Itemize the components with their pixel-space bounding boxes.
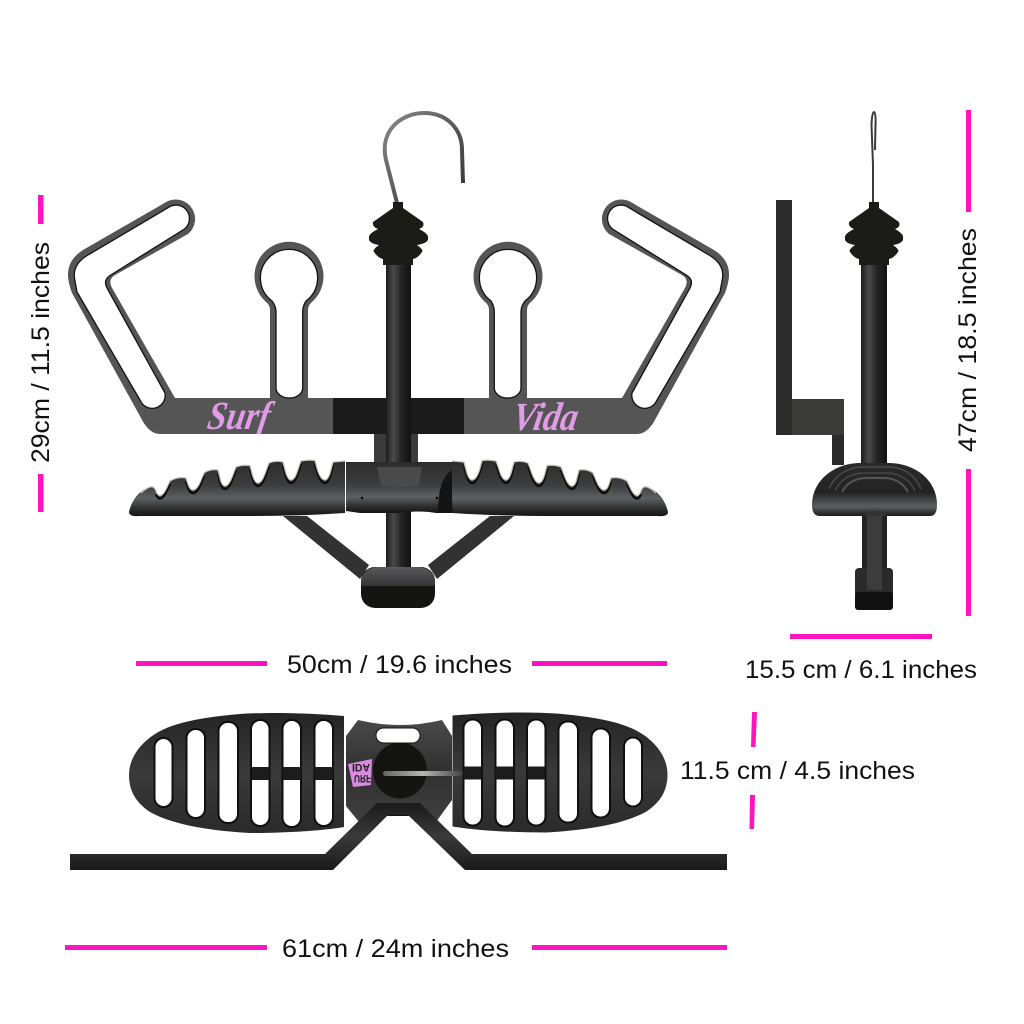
rear post block bbox=[374, 432, 418, 464]
dimension: overall height 47cm: 47cm / 18.5 inches bbox=[954, 228, 982, 452]
right plate bbox=[463, 199, 729, 434]
side stem bbox=[862, 514, 887, 572]
side bar block bbox=[792, 399, 844, 435]
side post bbox=[832, 435, 844, 465]
dimension: overall height 47cm bbox=[954, 110, 982, 616]
centre dark section bbox=[333, 398, 464, 434]
side plate bbox=[776, 200, 792, 435]
dimension: tray width 50cm: 50cm / 19.6 inches bbox=[287, 651, 512, 679]
dimension: tray depth 11.5cm: 11.5 cm / 4.5 inches bbox=[680, 757, 915, 785]
left plate bbox=[68, 199, 334, 434]
centre pole bbox=[386, 262, 411, 570]
pink label: IDA bbox=[352, 761, 370, 773]
top view: hanger bbox=[70, 712, 727, 870]
side bellows bbox=[845, 202, 903, 265]
dimension: overall width 61cm: 61cm / 24m inches bbox=[282, 935, 509, 963]
pink label: URF bbox=[354, 772, 371, 784]
dimension: overall width 61cm bbox=[65, 935, 727, 963]
side pole bbox=[861, 262, 887, 465]
right fin tray bbox=[452, 460, 668, 516]
side dome bbox=[812, 463, 937, 516]
support legs bbox=[283, 516, 514, 579]
dimension: tray width 50cm bbox=[136, 651, 667, 679]
right wing bbox=[452, 712, 668, 832]
brand word Surf: Surf bbox=[204, 393, 277, 438]
foot bbox=[361, 567, 435, 608]
bottom plate with V bracket bbox=[70, 803, 727, 870]
left wing bbox=[129, 713, 344, 833]
dimension: tray depth 11.5cm bbox=[680, 712, 915, 829]
hook bbox=[385, 113, 463, 203]
side foot bbox=[855, 514, 893, 610]
side hook bbox=[872, 112, 876, 202]
rubber bellows bbox=[369, 202, 428, 265]
dimension: front height 29cm bbox=[27, 195, 55, 512]
side view: hanger bbox=[776, 112, 937, 610]
dimension: depth 15.5cm: 15.5 cm / 6.1 inches bbox=[745, 656, 977, 684]
dimension: depth 15.5cm bbox=[745, 634, 977, 684]
hook seen from above bbox=[383, 771, 463, 776]
left fin tray bbox=[129, 460, 345, 516]
tray hub bbox=[346, 462, 453, 513]
pole cap oval bbox=[373, 742, 427, 798]
front view: hanger bbox=[68, 113, 729, 608]
brand word Vida: Vida bbox=[509, 394, 582, 439]
pink label bbox=[348, 759, 372, 787]
dimension: front height 29cm: 29cm / 11.5 inches bbox=[27, 242, 55, 463]
top hub bbox=[346, 720, 452, 822]
